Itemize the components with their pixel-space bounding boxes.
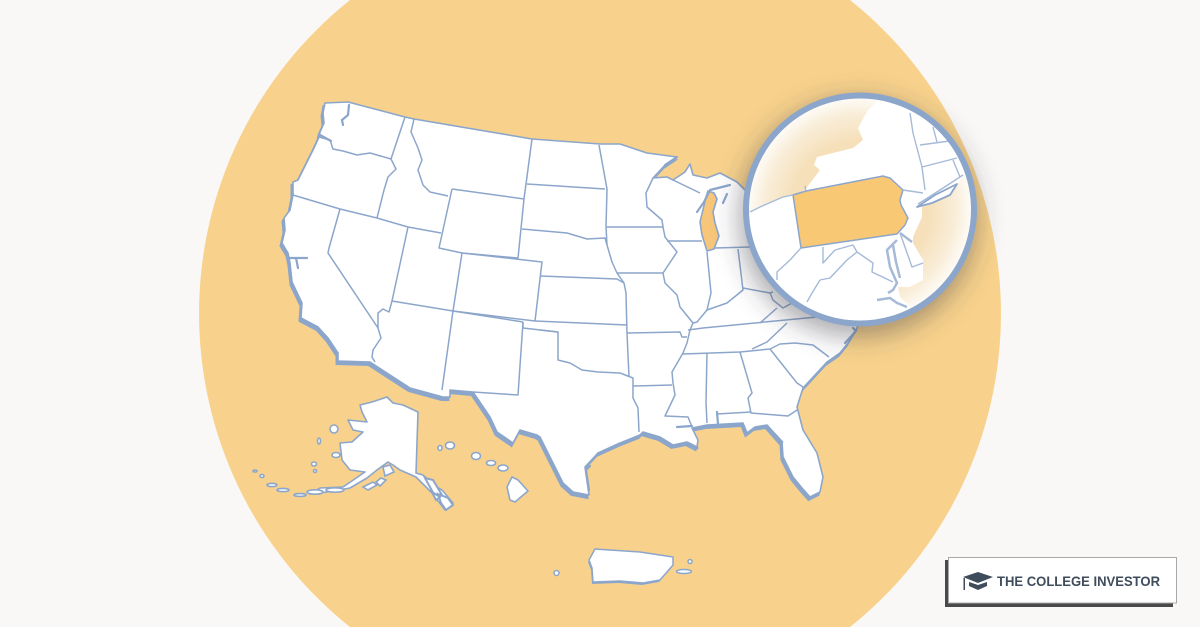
- icon: graduation cap: [963, 572, 993, 590]
- lens content: [745, 95, 975, 325]
- small islands: [554, 560, 692, 576]
- long island: [917, 184, 957, 207]
- bays and sounds: [287, 105, 856, 490]
- logo badge: [945, 558, 1176, 607]
- contiguous states landmass: [280, 102, 860, 500]
- lens ring: [746, 96, 974, 324]
- atlantic ocean: [898, 174, 971, 308]
- alaska panhandle islands: [425, 478, 453, 510]
- orange background circle: [199, 0, 1001, 627]
- lakes and canada: [745, 95, 877, 212]
- magnifier lens on pennsylvania: [739, 95, 977, 337]
- aleutian islands: [253, 425, 394, 496]
- chesapeake bay: [877, 233, 912, 307]
- logo text: THE COLLEGE INVESTOR: [997, 573, 1160, 589]
- pennsylvania: [793, 176, 908, 248]
- alaska: [253, 397, 453, 510]
- map of the United States: [253, 102, 860, 585]
- neighbouring state borders: [750, 113, 960, 302]
- lens shadow: [739, 99, 977, 337]
- hawaii: [438, 442, 528, 502]
- state borders: [293, 117, 829, 432]
- puerto rico: [554, 549, 692, 585]
- lake michigan: [700, 191, 719, 251]
- badge box: [945, 558, 1176, 607]
